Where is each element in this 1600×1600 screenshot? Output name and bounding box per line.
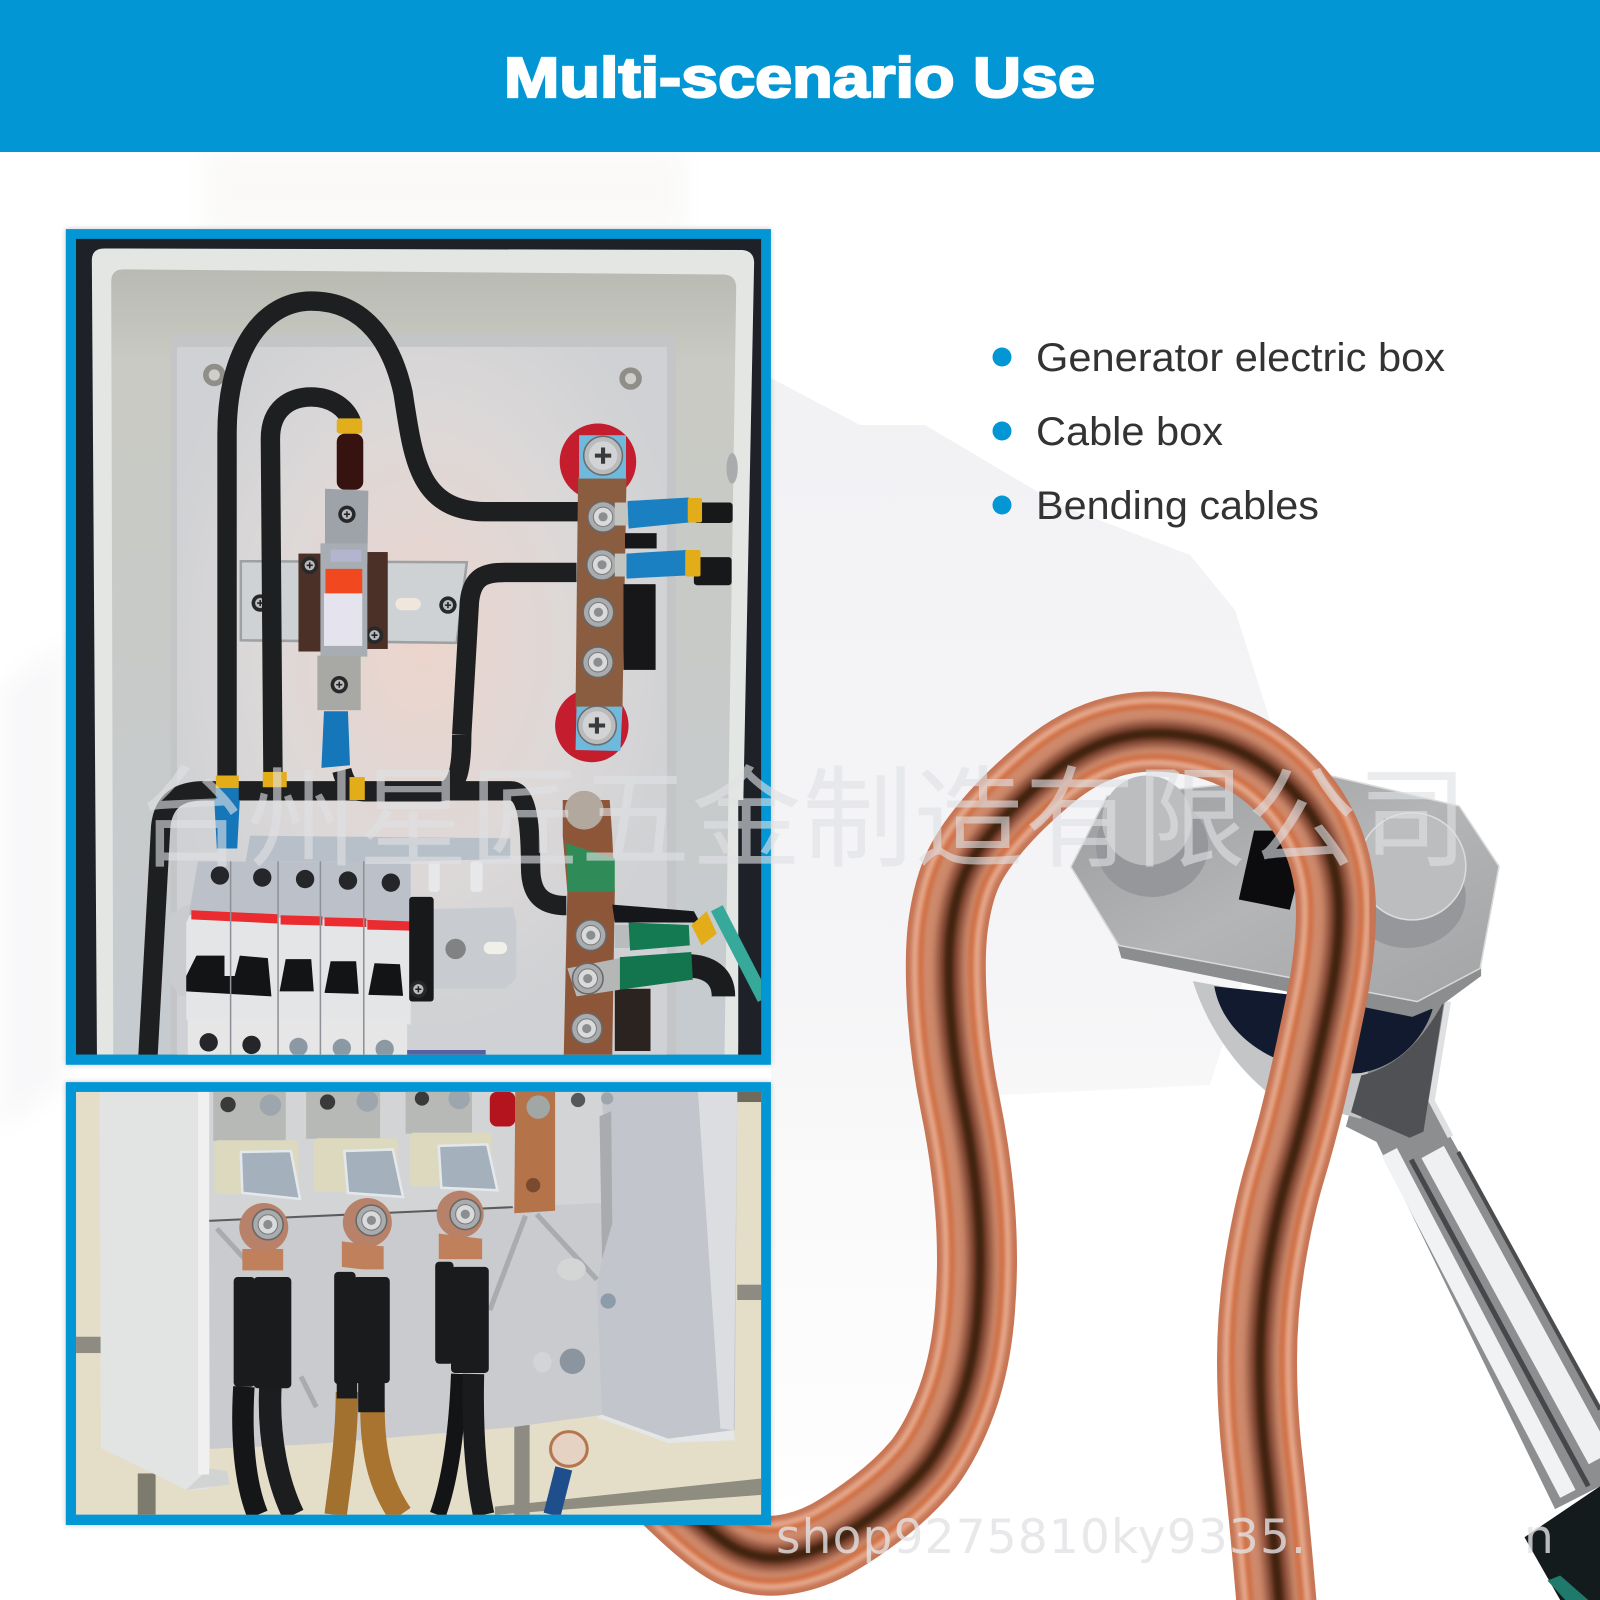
insulators and copper bus bar xyxy=(555,423,636,762)
yellow markers and blue lug xyxy=(216,772,365,804)
photo contents xyxy=(76,1088,761,1515)
photo contents xyxy=(76,239,764,1058)
bullet: bending cables: Bending cables xyxy=(1036,484,1319,528)
watermark: shop url xyxy=(776,1510,1554,1565)
right door xyxy=(597,1092,737,1439)
copper lugs xyxy=(239,1191,484,1280)
watermark: company name: 台州星匠五金制造有限公司 xyxy=(136,759,1468,882)
cream terminal blocks xyxy=(214,1133,491,1194)
panel: generator electric box photo xyxy=(66,229,771,1065)
blue lug top xyxy=(214,800,240,848)
lower black and brown cables xyxy=(243,1374,484,1515)
bending tool xyxy=(1071,775,1600,1600)
black terminal clip xyxy=(409,897,434,1002)
panel shadow xyxy=(66,1082,771,1525)
left door xyxy=(99,1092,210,1490)
tool lower wheel xyxy=(1193,981,1451,1138)
feature list xyxy=(992,336,1445,528)
circuit breakers xyxy=(168,861,411,1058)
black cables xyxy=(148,301,582,1056)
panel frame xyxy=(66,229,771,1065)
header bar xyxy=(0,0,1600,152)
tool handle xyxy=(1346,1002,1600,1509)
panel: cable box photo xyxy=(66,1082,771,1525)
right door edge xyxy=(738,800,761,1055)
copper cable xyxy=(670,732,1339,1600)
din rail xyxy=(241,561,467,643)
panel shadow xyxy=(66,229,771,1065)
mounting plates xyxy=(213,1088,472,1141)
screws on plate xyxy=(203,364,738,484)
blue cable lugs xyxy=(615,497,733,670)
tool grip xyxy=(1524,1486,1600,1600)
bullet: generator electric box: Generator electric box xyxy=(1036,336,1445,380)
small hardware xyxy=(533,1092,616,1374)
bullet: cable box: Cable box xyxy=(1036,410,1223,454)
metal clips xyxy=(241,1144,497,1199)
black insulation wraps xyxy=(234,1262,489,1412)
bottom label xyxy=(407,1050,486,1055)
box interior xyxy=(208,1092,603,1449)
wall xyxy=(76,1092,761,1515)
silver rail behind breakers xyxy=(246,836,510,862)
green bus and copper bar xyxy=(563,791,723,1055)
title: Multi-scenario Use xyxy=(504,46,1095,110)
blue wire with copper end xyxy=(551,1432,587,1515)
teal earth wire xyxy=(717,908,764,999)
watermark: shop url: shop9275810ky9335. xyxy=(776,1510,1306,1565)
panel frame xyxy=(66,1082,771,1525)
watermark: shop url: n xyxy=(1524,1510,1554,1565)
surge protector module xyxy=(298,418,388,768)
background: faint worker silhouette xyxy=(0,152,1300,1500)
din rail right xyxy=(434,907,516,988)
copper busbar xyxy=(490,1092,555,1213)
tool head plate xyxy=(1071,775,1499,1017)
